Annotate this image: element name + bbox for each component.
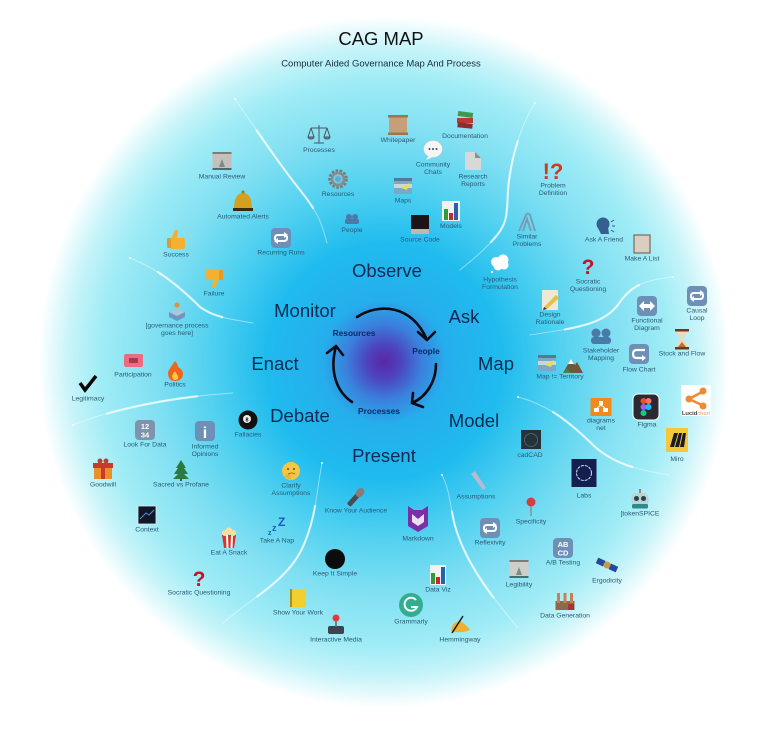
item: Clarify Assumptions: Assumptions: [272, 490, 311, 497]
item: Research Reports: Reports: [461, 181, 485, 188]
item: Reflexivity: Reflexivity: [475, 540, 506, 546]
item: Map != Territory: Map != Territory: [536, 374, 584, 380]
item: Data Viz: Data Viz: [425, 586, 451, 594]
item: Participation: Participation: [114, 372, 152, 378]
item: Fallacies: Fallacies: [235, 432, 262, 438]
item: Interactive Media: [310, 614, 362, 644]
item: Legibility: [506, 560, 533, 588]
item: Take A Nap: Z: [278, 515, 285, 529]
item: Socratic Questioning: Socratic: [576, 278, 601, 286]
arrow: processes to resources: [327, 346, 352, 402]
item: Recurring Runs: [257, 228, 305, 256]
item: Automated Alerts: [217, 190, 269, 220]
stage heading: Enact: Enact: [251, 353, 299, 374]
item: Documentation: Documentation: [442, 133, 488, 140]
item: Labs: [572, 459, 596, 500]
panel: Present tools: [273, 486, 481, 644]
item: Socratic Questioning (debate): Socratic Questioning: [168, 590, 231, 596]
item: Hemmingway: [439, 616, 481, 644]
item: Problem Definition: !?: [543, 159, 563, 184]
item: Flow Chart: Flow Chart: [623, 366, 656, 374]
item: tokenSPICE: [621, 489, 660, 518]
item: Ask A Friend: [585, 218, 623, 244]
label: Processes: Processes: [358, 406, 400, 416]
item: Community Chats: Chats: [424, 169, 442, 176]
panel: Observe tools: [303, 111, 488, 243]
item: Assumptions: Assumptions: [457, 494, 496, 500]
item: Take A Nap: z: [268, 530, 272, 537]
item: Problem Definition: [539, 159, 567, 197]
item: Lucidchart: [681, 385, 711, 417]
item: Sacred vs Profane: Sacred vs Profane: [153, 482, 209, 488]
item: Community Chats: Community: [416, 162, 451, 168]
item: Maps: Maps: [395, 198, 412, 204]
panel: Debate tools: [90, 410, 311, 596]
item: Whitepaper: [381, 115, 416, 144]
item: Know Your Audience: [325, 486, 387, 514]
item: Lucidchart: Lucidchart: [682, 411, 711, 417]
panel: Ask tools: [482, 159, 659, 326]
item: Hypothesis Formulation: Formulation: [482, 284, 518, 291]
stage heading: Monitor: Monitor: [274, 300, 336, 321]
item: Show Your Work: Show Your Work: [273, 610, 324, 616]
item: governance process: goes here]: [161, 330, 193, 337]
item: A/B Testing: A/B Testing: [546, 560, 580, 566]
item: Problem Definition: Problem: [540, 182, 566, 190]
item: Models: [440, 201, 463, 230]
item: Similar Problems: Problems: [513, 241, 542, 248]
item: Look For Data: [123, 420, 167, 448]
item: Success: Success: [163, 252, 189, 258]
item: Source Code: Source Code: [400, 236, 440, 244]
item: Flow Chart: [623, 344, 656, 374]
item: Functional Diagram: Diagram: [634, 325, 660, 332]
stage heading: Ask: Ask: [449, 306, 480, 327]
item: Assumptions: [457, 471, 496, 500]
item: Look For Data: 34: [141, 430, 150, 440]
label: People: People: [412, 346, 440, 356]
item: cadCAD: [517, 430, 543, 459]
item: Socratic Questioning: ?: [582, 256, 594, 279]
item: Markdown: Markdown: [402, 536, 434, 542]
panel: Monitor tools: [163, 152, 305, 298]
item: Causal Loop: Causal: [686, 308, 708, 314]
item: Fallacies: 8: [245, 417, 249, 423]
item: Make A List: Make A List: [625, 256, 659, 262]
item: Socratic Questioning: Questioning: [570, 286, 606, 293]
item: Processes: Processes: [303, 147, 335, 154]
item: Socratic Questioning (debate): ?: [193, 568, 205, 591]
item: Recurring Runs: Recurring Runs: [257, 250, 305, 256]
panel: Map tools: [536, 286, 711, 463]
item: Specificity: Specificity: [516, 518, 547, 526]
label: Resources: Resources: [333, 328, 376, 338]
item: Interactive Media: Interactive Media: [310, 636, 362, 644]
item: Context: Context: [135, 526, 159, 534]
item: Reflexivity: [475, 518, 506, 546]
item: Stakeholder Mapping: Stakeholder: [583, 348, 620, 354]
item: Hypothesis Formulation: Hypothesis: [483, 276, 517, 284]
item: Problem Definition: Definition: [539, 190, 567, 197]
item: Legitimacy: Legitimacy: [72, 396, 105, 402]
item: Automated Alerts: Automated Alerts: [217, 214, 269, 220]
item: Context: [135, 506, 159, 534]
item: Clarify Assumptions: Clarify: [281, 482, 301, 490]
item: Politics: Politics: [164, 382, 186, 388]
item: Goodwill: [90, 458, 117, 488]
item: Success: [163, 230, 189, 258]
item: diagrams.net: diagrams: [587, 418, 616, 424]
item: Documentation: [442, 111, 488, 140]
item: Data Generation: [540, 593, 590, 620]
item: Know Your Audience: Know Your Audience: [325, 508, 387, 514]
stage heading: Map: Map: [478, 353, 514, 374]
item: Causal Loop: [686, 286, 708, 322]
item: Grammarly: [394, 593, 428, 626]
item: tokenSPICE: [tokenSPICE: [621, 510, 660, 518]
item: Manual Review: Manual Review: [199, 174, 245, 180]
item: Legibility: Legibility: [506, 582, 533, 588]
item: Design Rationale: Rationale: [536, 319, 565, 326]
item: Look For Data: 12: [141, 422, 149, 431]
item: Ergodicity: Ergodicity: [592, 578, 623, 584]
item: Eat A Snack: [211, 528, 248, 556]
item: Stock and Flow: Stock and Flow: [659, 350, 705, 358]
panel: Enact tools: [72, 302, 209, 402]
item: Grammarly: Grammarly: [394, 618, 428, 626]
item: Eat A Snack: Eat A Snack: [211, 550, 248, 556]
item: Sacred vs Profane: [153, 460, 209, 488]
item: Ergodicity: [592, 557, 623, 584]
item: Failure: Failure: [204, 290, 225, 298]
item: Research Reports: Research: [458, 174, 488, 180]
item: Figma: [633, 394, 659, 428]
item: governance process: [governance process: [145, 322, 209, 330]
arrow: resources to people: [357, 309, 435, 340]
item: diagrams.net: [587, 398, 616, 432]
item: Markdown: [402, 506, 434, 542]
item: Processes: [303, 125, 335, 154]
item: A/B Testing: AB: [558, 540, 569, 549]
item: Keep It Simple: [313, 549, 357, 578]
item: cadCAD: cadCAD: [517, 452, 543, 459]
item: Community Chats: [416, 140, 451, 176]
sector divider curves: [73, 99, 673, 627]
item: Maps: [394, 178, 412, 204]
title: CAG MAP: [338, 28, 424, 49]
item: Data Generation: Data Generation: [540, 612, 590, 620]
item: Specificity: [516, 498, 547, 526]
stage heading: Model: Model: [449, 410, 499, 431]
subtitle: Computer Aided Governance Map And Process: [281, 58, 481, 70]
stage heading: Observe: Observe: [352, 260, 422, 281]
arrow: people to processes: [412, 364, 436, 407]
item: Hypothesis Formulation: [482, 254, 518, 291]
stage heading: Present: Present: [352, 445, 416, 466]
item: Map != Territory: [536, 355, 584, 380]
item: Models: Models: [440, 223, 463, 230]
item: Informed Opinions: Informed: [192, 444, 219, 450]
item: Stock and Flow: [659, 329, 705, 358]
item: Failure: [204, 269, 225, 298]
item: Research Reports: [458, 152, 488, 188]
item: A/B Testing: CD: [558, 548, 569, 558]
item: Whitepaper: Whitepaper: [381, 137, 416, 144]
item: People: [341, 214, 363, 234]
item: Informed Opinions: [192, 421, 219, 458]
item: Functional Diagram: [631, 296, 663, 332]
panel: Model tools: [457, 430, 660, 620]
central cycle diagram: [327, 309, 440, 416]
item: Similar Problems: Similar: [517, 234, 538, 240]
item: Hemmingway: Hemmingway: [439, 636, 481, 644]
item: Design Rationale: [536, 290, 565, 326]
item: Miro: [666, 428, 688, 463]
item: Fallacies: [235, 410, 262, 438]
item: Informed Opinions: i: [203, 425, 207, 442]
item: Keep It Simple: Keep It Simple: [313, 570, 357, 578]
item: Design Rationale: Design: [539, 312, 561, 318]
item: Stakeholder Mapping: [583, 328, 620, 362]
item: Similar Problems: [513, 214, 542, 248]
item: People: People: [341, 227, 363, 234]
item: Goodwill: Goodwill: [90, 482, 117, 488]
item: Take A Nap: z: [272, 523, 277, 533]
item: Stakeholder Mapping: Mapping: [588, 355, 614, 362]
item: Causal Loop: Loop: [689, 315, 705, 322]
item: Look For Data: Look For Data: [123, 442, 167, 448]
item: Show Your Work: [273, 589, 324, 616]
item: diagrams.net: net: [596, 425, 606, 432]
item: Informed Opinions: Opinions: [192, 451, 219, 458]
item: Clarify Assumptions: [272, 462, 311, 497]
item: Resources: [322, 171, 355, 198]
item: Manual Review: [199, 152, 245, 180]
item: Data Viz: [425, 565, 451, 594]
stage heading: Debate: Debate: [270, 405, 330, 426]
item: Take A Nap: [260, 515, 294, 544]
item: Labs: Labs: [577, 492, 592, 500]
item: Resources: Resources: [322, 191, 355, 198]
item: Socratic Questioning (debate): [168, 568, 231, 596]
item: Miro: Miro: [670, 456, 684, 463]
item: Take A Nap: Take A Nap: [260, 538, 294, 544]
item: Socratic Questioning: [570, 256, 606, 293]
item: A/B Testing: [546, 538, 580, 566]
item: Ask A Friend: Ask A Friend: [585, 236, 623, 244]
item: governance process: [145, 302, 209, 337]
item: Figma: Figma: [638, 422, 657, 428]
item: Make A List: [625, 235, 659, 262]
item: Source Code: [400, 215, 440, 244]
item: Functional Diagram: Functional: [631, 318, 663, 324]
